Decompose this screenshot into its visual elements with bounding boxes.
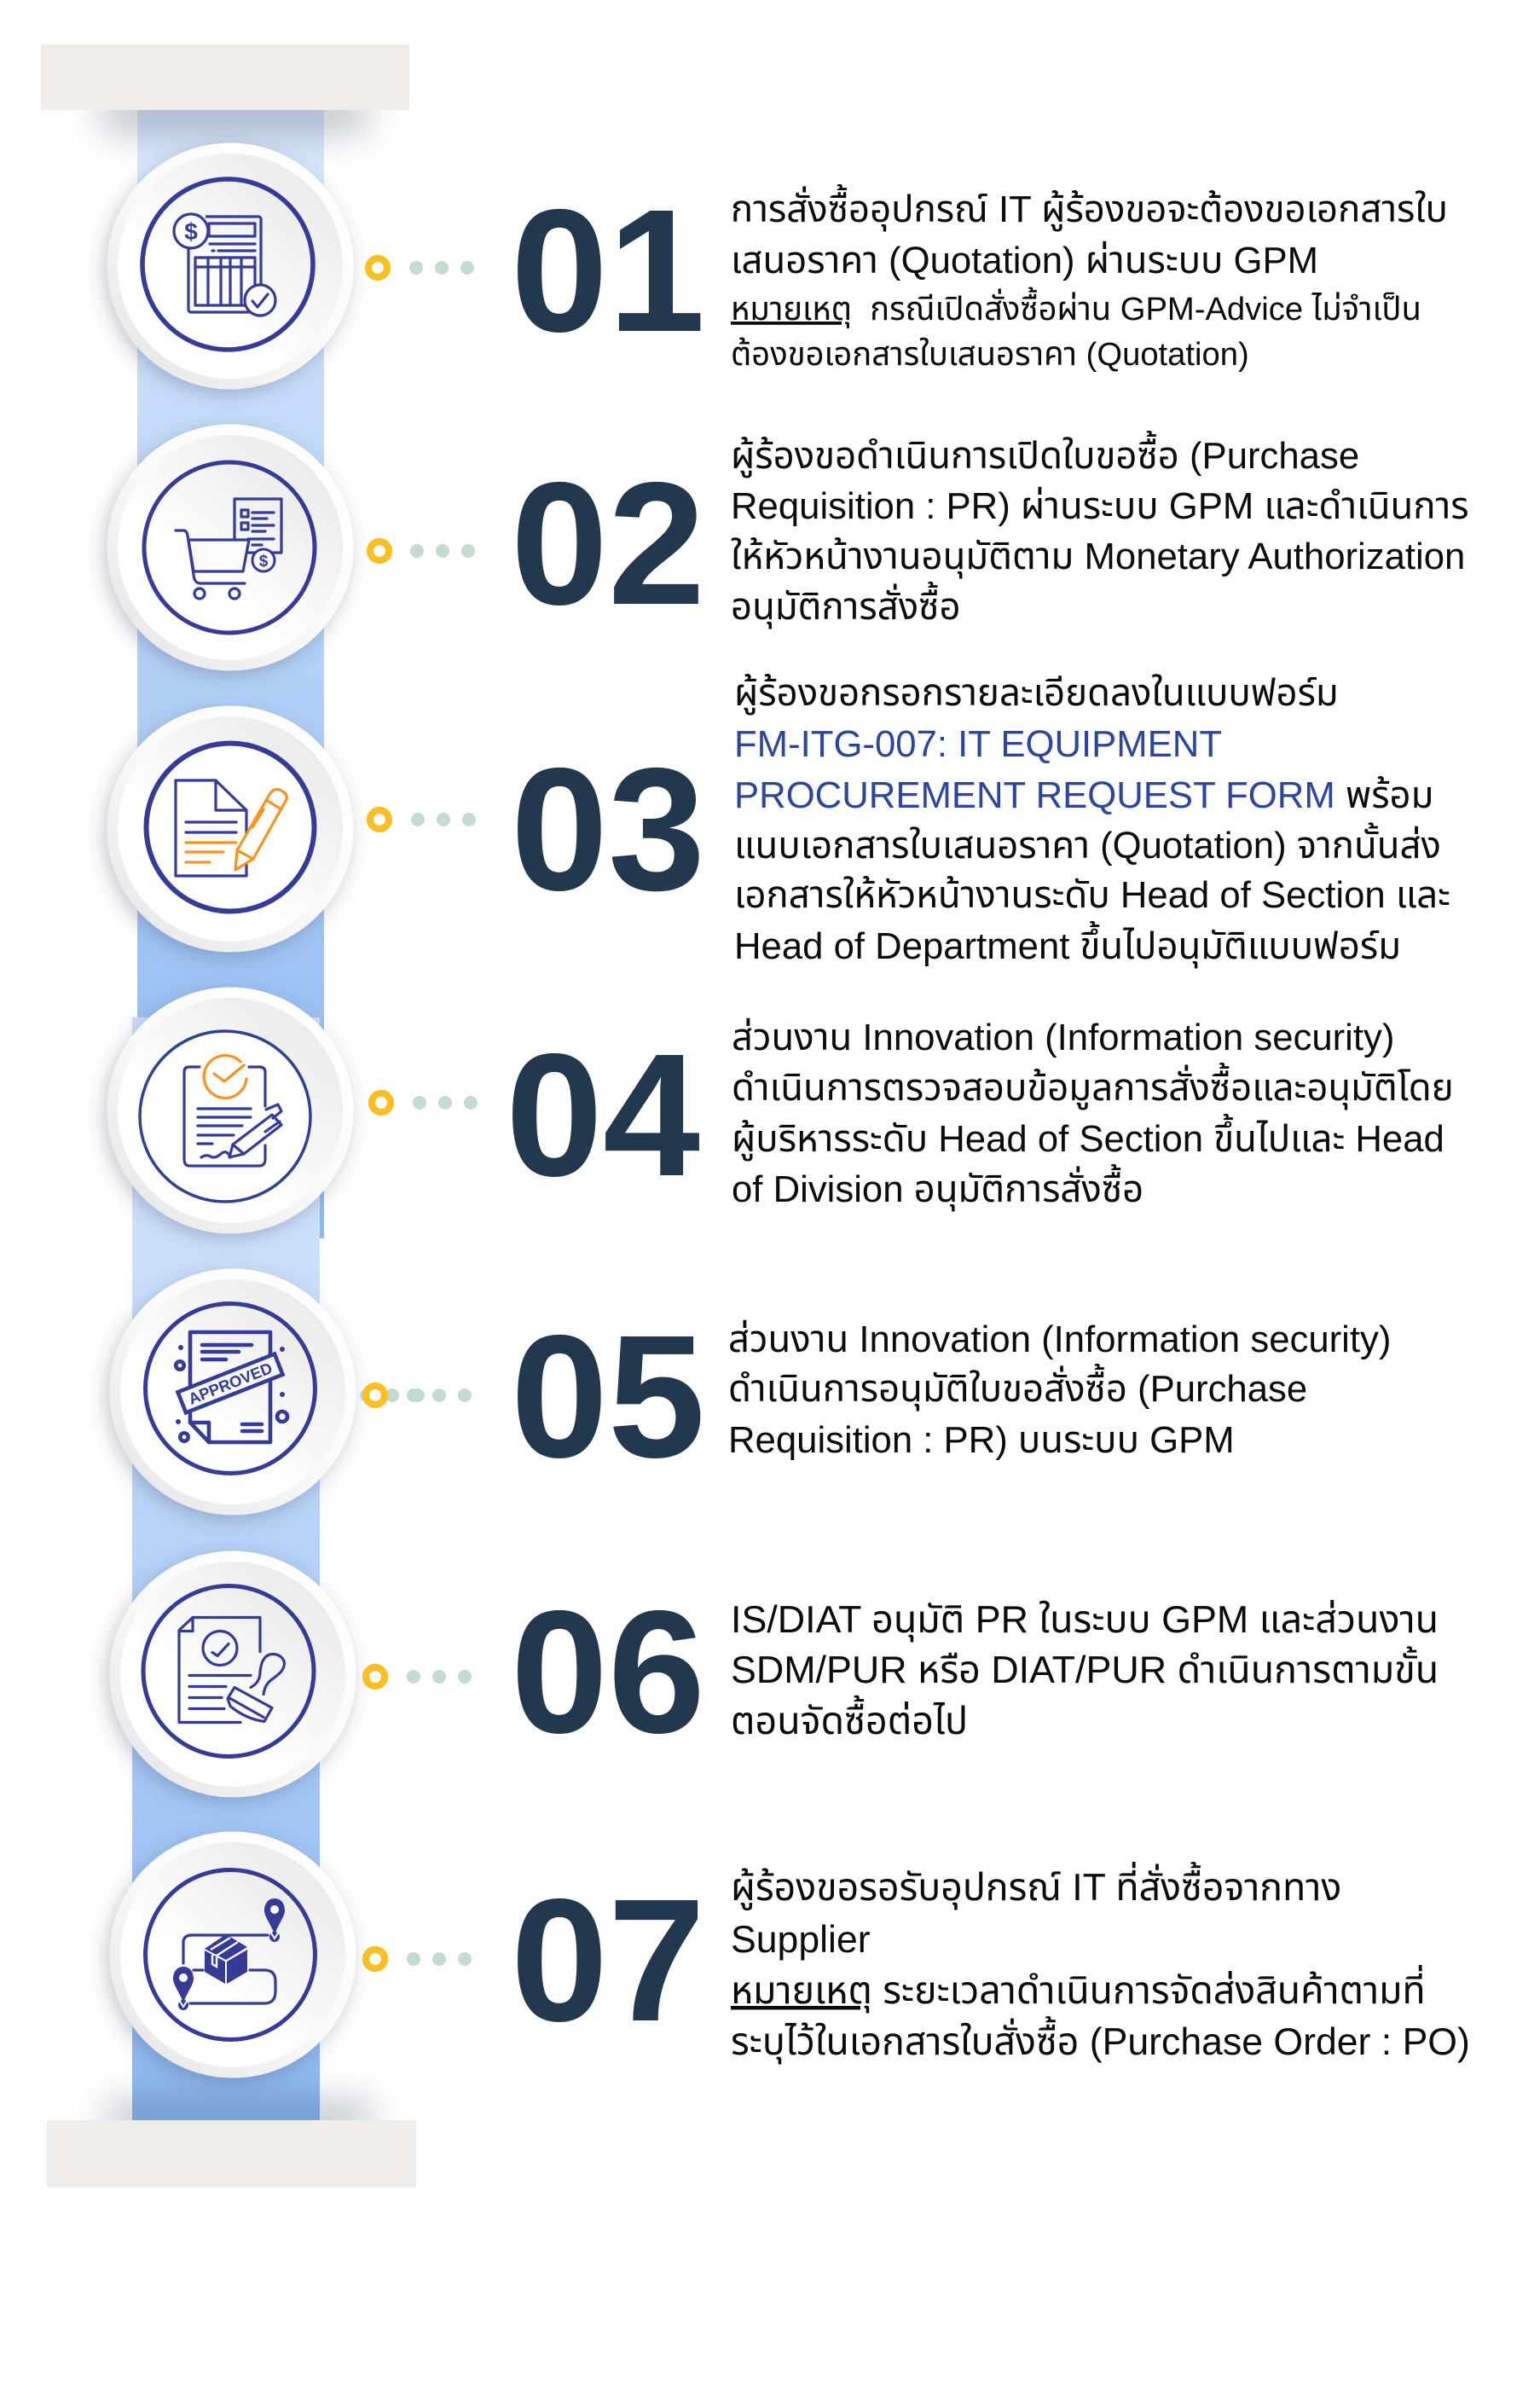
number 01: 01 <box>511 173 705 368</box>
text 04 <box>732 1017 1454 1212</box>
text 01: การสั่งซื้ออุปกรณ์ IT ผู้ร้องขอจะต้องขอเอกสารใบ <box>731 183 1448 232</box>
icon disc 02 <box>107 425 353 670</box>
icon disc 04 <box>107 988 353 1233</box>
text 04: of Division อนุมัติการสั่งซื้อ <box>732 1163 1143 1212</box>
connector dots 01 <box>368 258 474 277</box>
text 02: ผู้ร้องขอดำเนินการเปิดใบขอซื้อ (Purchase <box>731 430 1359 478</box>
text 07 <box>731 1862 1470 2065</box>
icon disc 01 <box>107 143 353 389</box>
text 04: ส่วนงาน Innovation (Information security) <box>732 1017 1394 1058</box>
top plate <box>41 44 409 110</box>
text 05: ดำเนินการอนุมัติใบขอสั่งซื้อ (Purchase <box>728 1363 1307 1411</box>
icon disc 03 <box>107 706 353 952</box>
text 05 <box>728 1319 1391 1461</box>
connector dots 05 <box>360 1386 472 1405</box>
icon disc 06 <box>109 1550 356 1798</box>
step 07 <box>109 1832 1470 2078</box>
connector dots 06 <box>366 1667 472 1686</box>
icon: quotation document: $ <box>184 218 198 245</box>
text 07: ผู้ร้องขอรอรับอุปกรณ์ IT ที่สั่งซื้อจากทาง <box>731 1862 1341 1910</box>
text 05: Requisition : PR) บนระบบ GPM <box>728 1419 1235 1461</box>
text 06: SDM/PUR หรือ DIAT/PUR ดำเนินการตามขั้น <box>731 1646 1439 1691</box>
step 03 <box>107 672 1450 969</box>
step 04 <box>107 988 1454 1233</box>
text 01: ต้องขอเอกสารใบเสนอราคา (Quotation) <box>731 336 1249 373</box>
number 04: 04 <box>506 1017 700 1213</box>
text 02: อนุมัติการสั่งซื้อ <box>731 581 961 629</box>
icon: signed checklist <box>184 1055 281 1166</box>
text 05: ส่วนงาน Innovation (Information security) <box>728 1319 1391 1360</box>
text 07: ระบุไว้ในเอกสารใบสั่งซื้อ (Purchase Order : PO) <box>731 2016 1470 2065</box>
text 03: FM-ITG-007: IT EQUIPMENT <box>734 723 1222 765</box>
icon disc 05 <box>109 1269 356 1515</box>
number 03: 03 <box>511 732 705 927</box>
text 01: หมายเหตุ กรณีเปิดสั่งซื้อผ่าน GPM-Advice ไม่จำเป็น <box>731 287 1421 328</box>
icon: approved document: APPROVED <box>186 1359 275 1408</box>
bottom plate shadow <box>107 2102 371 2133</box>
icon: parcel delivery route <box>173 1898 285 2010</box>
text 03: ผู้ร้องขอกรอกรายละเอียดลงในแบบฟอร์ม <box>734 672 1339 716</box>
text 03: Head of Department ขึ้นไปอนุมัติแบบฟอร์ม <box>734 920 1401 969</box>
text 06 <box>731 1598 1439 1742</box>
top plate shadow <box>102 96 367 131</box>
icon: form and pencil <box>176 780 287 876</box>
step 01 <box>107 143 1448 389</box>
text 07: หมายเหตุ ระยะเวลาดำเนินการจัดส่งสินค้าตามที่ <box>731 1965 1426 2014</box>
text 01: เสนอราคา (Quotation) ผ่านระบบ GPM <box>731 240 1318 281</box>
icon: approved document <box>176 1332 287 1442</box>
number 05: 05 <box>511 1299 705 1494</box>
bottom plate <box>47 2120 416 2188</box>
text 03: เอกสารให้หัวหน้างานระดับ Head of Section และ <box>734 874 1450 916</box>
step 06 <box>109 1550 1439 1798</box>
panel: vertical timeline band <box>132 110 324 2120</box>
text 02 <box>731 430 1469 629</box>
text 02: ให้หัวหน้างานอนุมัติตาม Monetary Authorization <box>731 536 1465 579</box>
text 02: Requisition : PR) ผ่านระบบ GPM และดำเนินการ <box>731 485 1469 527</box>
icon: shopping cart with requisition: $ <box>259 553 269 571</box>
text 07: Supplier <box>731 1919 871 1961</box>
text 06: ตอนจัดซื้อต่อไป <box>731 1695 968 1742</box>
icon: quotation document <box>174 214 275 316</box>
connector dots 04 <box>372 1093 478 1112</box>
number 06: 06 <box>511 1574 705 1770</box>
text 01 <box>731 183 1448 373</box>
text 03: แนบเอกสารใบเสนอราคา (Quotation) จากนั้นส่ง <box>734 821 1441 867</box>
text 04: ผู้บริหารระดับ Head of Section ขึ้นไปและ Head <box>732 1113 1444 1162</box>
connector dots 03 <box>370 810 476 829</box>
text 04: ดำเนินการตรวจสอบข้อมูลการสั่งซื้อและอนุมัติโดย <box>732 1062 1454 1110</box>
text 03 <box>734 672 1450 969</box>
step 02 <box>107 425 1469 670</box>
step 05 <box>109 1269 1391 1515</box>
icon disc 07 <box>109 1832 356 2078</box>
icon: stamped document <box>179 1617 284 1723</box>
number 07: 07 <box>511 1863 705 2058</box>
connector dots 02 <box>370 542 475 560</box>
text 03: PROCUREMENT REQUEST FORM พร้อม <box>734 774 1433 816</box>
number 02: 02 <box>511 446 705 641</box>
icon: shopping cart with requisition <box>176 499 281 599</box>
connector dots 07 <box>366 1950 472 1968</box>
text 06: IS/DIAT อนุมัติ PR ในระบบ GPM และส่วนงาน <box>731 1598 1439 1643</box>
